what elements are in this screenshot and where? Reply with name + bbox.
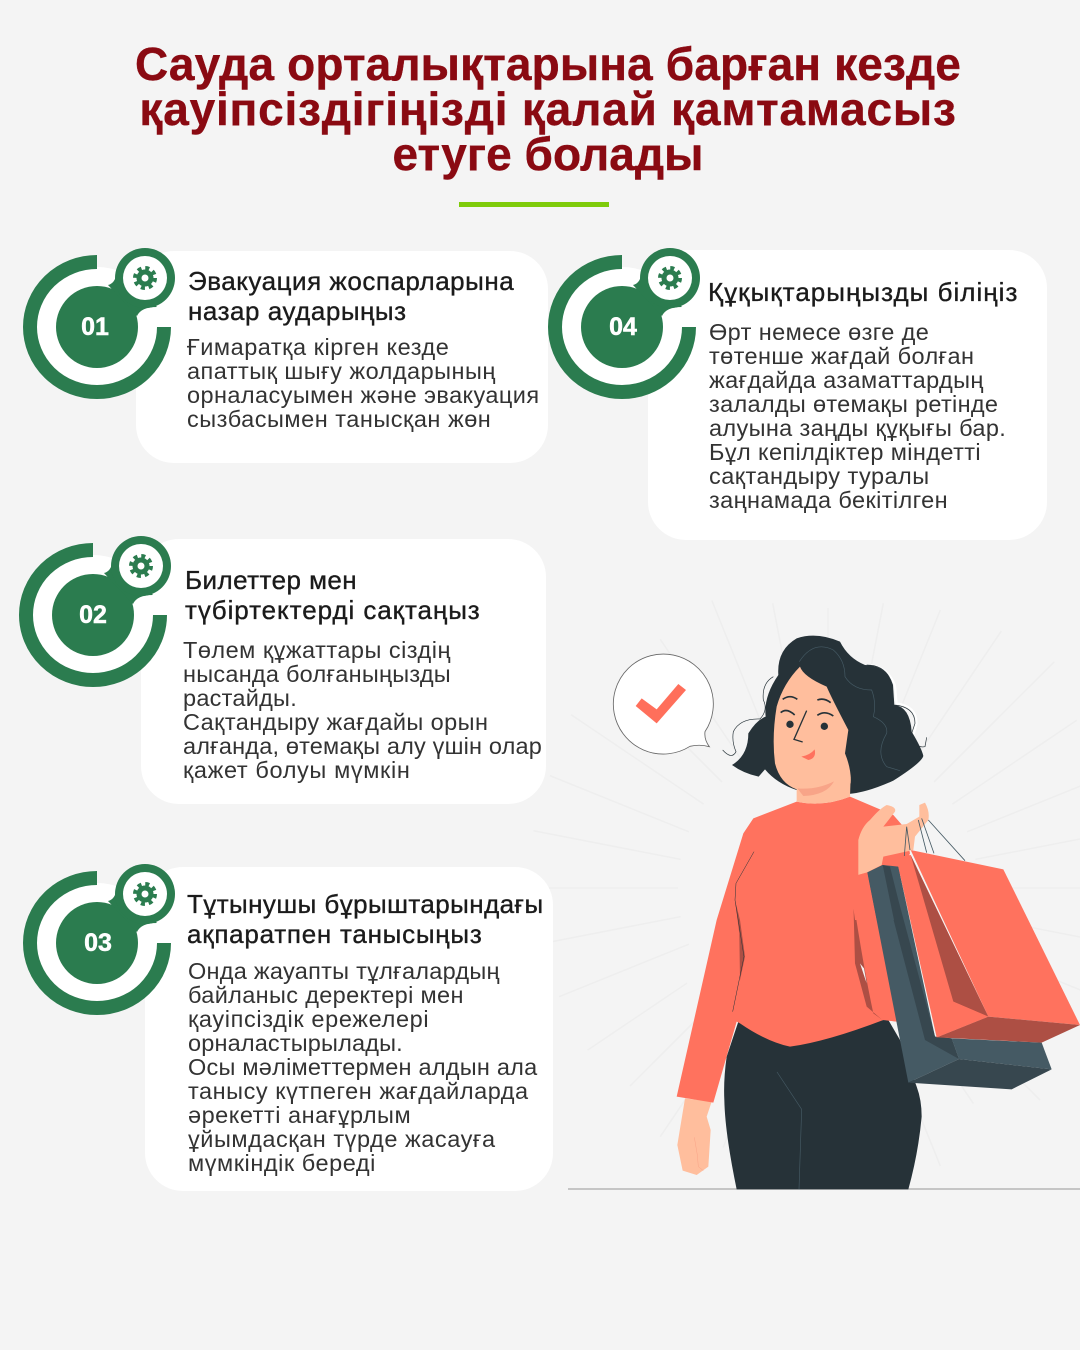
card 03 text: танысу күтпеген жағдайларда xyxy=(188,1078,529,1104)
card 02 text: қажет болуы мүмкін xyxy=(183,757,410,783)
card 04 background xyxy=(648,250,1047,540)
card 02 heading xyxy=(185,565,481,625)
badge: 01: 01 xyxy=(81,313,109,341)
card 03 background xyxy=(145,867,553,1191)
red front bag xyxy=(896,855,988,1037)
card 01 heading xyxy=(188,266,514,326)
card 01 heading: Эвакуация жоспарларына xyxy=(188,266,514,296)
card 02 text: растайды. xyxy=(183,685,297,711)
card 01 text: орналасуымен және эвакуация xyxy=(187,382,540,408)
card 02 text: Сақтандыру жағдайы орын xyxy=(183,709,488,735)
dark back bag xyxy=(867,865,959,1083)
sleeve beside the bags xyxy=(853,897,897,1022)
card 03 text: ұйымдасқан түрде жасауға xyxy=(188,1126,496,1152)
card 04 text: Бұл кепілдіктер міндетті xyxy=(709,439,981,465)
card 02 heading: Билеттер мен xyxy=(185,565,357,595)
card 03 text: Онда жауапты тұлғалардың xyxy=(188,958,500,984)
card 03 text: қауіпсіздік ережелері xyxy=(188,1006,429,1032)
badge: 04: 04 xyxy=(609,313,637,341)
lower body xyxy=(677,1020,922,1189)
card 02 text: нысанда болғаныңызды xyxy=(183,661,451,687)
card 04 text: алуына заңды құқығы бар. xyxy=(709,415,1006,441)
card 01 text: апаттық шығу жолдарының xyxy=(187,358,496,384)
card 04 text: заңнамада бекітілген xyxy=(709,487,948,513)
card 03 text: әрекетті анағұрлым xyxy=(188,1102,411,1128)
card 04 text: Өрт немесе өзге де xyxy=(709,319,929,345)
badge: 02 xyxy=(26,536,171,680)
card 01 background xyxy=(136,251,548,463)
card 02 heading: түбіртектерді сақтаңыз xyxy=(185,595,481,625)
card 01 text: Ғимаратқа кірген кезде xyxy=(187,334,449,360)
card 01 text: сызбасымен танысқан жөн xyxy=(187,406,491,432)
card 04 text: сақтандыру туралы xyxy=(709,463,930,489)
badge: 03 xyxy=(30,864,175,1008)
card 04 text: залалды өтемақы ретінде xyxy=(709,391,998,417)
title xyxy=(135,38,961,180)
card 04 text: төтенше жағдай болған xyxy=(709,343,974,369)
card 01 text xyxy=(187,334,540,432)
card 03 heading: Тұтынушы бұрыштарындағы xyxy=(187,889,544,919)
hand and bag handles xyxy=(849,803,965,920)
card 04 text xyxy=(709,319,1006,513)
badge: 01 xyxy=(30,248,175,392)
speech bubble with check mark xyxy=(613,654,713,754)
badge: 02: 02 xyxy=(79,601,107,629)
title: қауіпсіздігіңізді қалай қамтамасыз xyxy=(139,83,957,135)
card 02 background xyxy=(141,539,546,804)
card 02 text: алғанда, өтемақы алу үшін олар xyxy=(183,733,542,759)
card 03 text: орналастырылады. xyxy=(188,1030,403,1056)
card 03 text: Осы мәліметтермен алдын ала xyxy=(188,1054,537,1080)
card 03 text xyxy=(188,958,538,1176)
badge: 04 xyxy=(555,248,700,392)
card 02 text: Төлем құжаттары сіздің xyxy=(183,637,451,663)
badge: 03: 03 xyxy=(84,929,112,957)
card 03 heading xyxy=(187,889,544,949)
card 03 heading: ақпаратпен танысыңыз xyxy=(187,919,483,949)
card 04 text: жағдайда азаматтардың xyxy=(709,367,984,393)
card 02 text xyxy=(183,637,542,783)
card 03 text: мүмкіндік береді xyxy=(188,1150,376,1176)
title underline xyxy=(459,202,609,207)
card 01 heading: назар аударыңыз xyxy=(188,296,407,326)
card 04 heading: Құқықтарыңызды біліңіз xyxy=(708,277,1018,307)
title: етуге болады xyxy=(392,128,704,180)
title: Сауда орталықтарына барған кезде xyxy=(135,38,961,90)
upper body, neck and head xyxy=(677,636,927,1103)
card 03 text: байланыс деректері мен xyxy=(188,982,464,1008)
shopping bags xyxy=(853,850,1080,1089)
